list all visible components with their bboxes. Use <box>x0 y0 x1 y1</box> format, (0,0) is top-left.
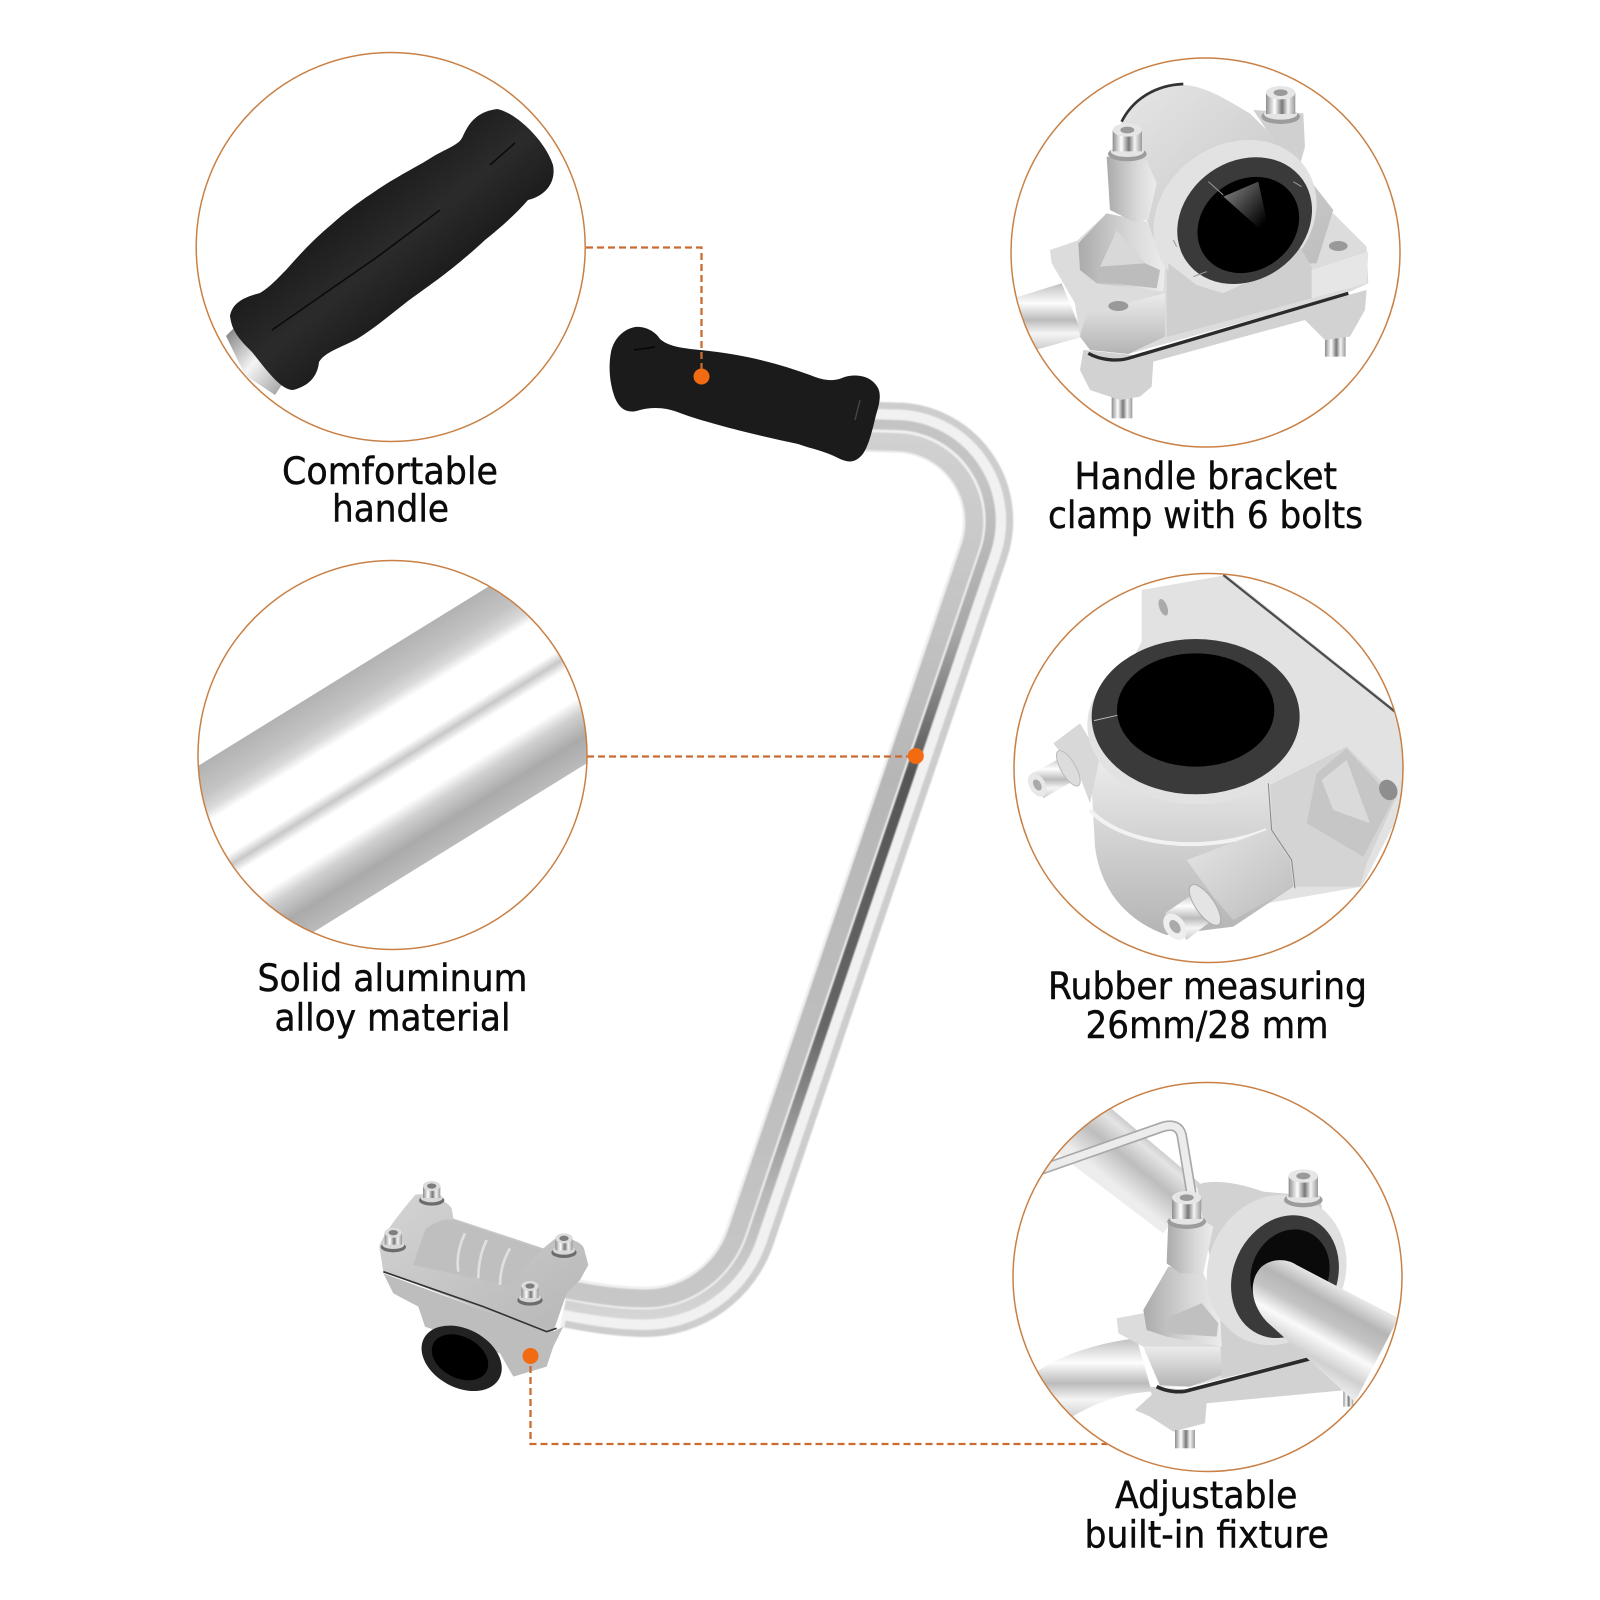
connector: built-in fixture <box>522 1348 1107 1444</box>
caption: aluminum alloy <box>258 957 528 1040</box>
back barrel <box>1121 85 1333 270</box>
caption: comfortable handle: Comfortable <box>282 450 498 493</box>
caption: comfortable handle: handle <box>332 488 449 530</box>
panel: adjustable fixture <box>1013 1082 1402 1472</box>
product: clamp on tube end <box>379 1181 588 1404</box>
clamp rubber sleeve <box>410 1312 513 1404</box>
rear plate <box>1136 575 1402 903</box>
stub tube <box>1013 283 1083 350</box>
caption: rubber measuring: Rubber measuring <box>1048 965 1367 1008</box>
lower cylinder <box>1090 757 1293 935</box>
connector: comfortable handle <box>586 248 710 384</box>
side rib <box>1143 1267 1222 1347</box>
caption: rubber measuring: 26mm/28 mm <box>1086 1004 1328 1047</box>
panel: handle bracket clamp <box>1011 58 1400 447</box>
caption: adjustable fixture: Adjustable <box>1115 1474 1298 1517</box>
left bolt lug <box>1053 723 1100 803</box>
panel: aluminum tube closeup <box>197 560 588 950</box>
caption: adjustable fixture <box>1084 1474 1329 1556</box>
clamp lower body <box>383 1273 563 1377</box>
side rib <box>1078 213 1165 292</box>
caption: aluminum alloy: alloy material <box>274 996 510 1040</box>
right rib <box>1267 747 1397 887</box>
caption: rubber measuring <box>1048 965 1367 1047</box>
bolt towers <box>1107 157 1157 222</box>
rubber ring <box>1092 639 1300 794</box>
front face under ring <box>1168 247 1312 337</box>
product: black grip <box>610 327 880 461</box>
caption: bracket clamp <box>1048 455 1363 537</box>
back barrel <box>1197 1182 1322 1255</box>
front tube <box>1253 1260 1398 1402</box>
bolts <box>1167 1191 1206 1229</box>
curved lower tube <box>1037 1338 1152 1420</box>
lower block <box>1080 290 1367 400</box>
rear tube <box>1058 1108 1200 1234</box>
bore <box>1117 653 1274 767</box>
bore <box>1198 176 1300 274</box>
rubber ring <box>1177 157 1312 284</box>
product: aluminum tube <box>565 405 1010 1334</box>
caption: aluminum alloy: Solid aluminum <box>258 957 528 1000</box>
upper block <box>1050 213 1368 354</box>
clamp upper body <box>379 1194 588 1332</box>
rubber ring <box>1231 1215 1339 1338</box>
top bolts <box>1108 123 1147 161</box>
lower bolts <box>1112 397 1132 418</box>
panel: rubber sleeve <box>1014 574 1405 962</box>
caption: comfortable handle <box>282 450 498 530</box>
bottom bolt <box>1163 884 1221 940</box>
upper block <box>1117 1310 1313 1387</box>
caption: bracket clamp: clamp with 6 bolts <box>1048 494 1363 537</box>
caption: adjustable fixture: built-in fixture <box>1084 1514 1329 1556</box>
collar <box>1206 1195 1346 1345</box>
clamp ribbed barrel <box>413 1220 542 1287</box>
panel: comfortable handle <box>196 52 585 442</box>
connector: aluminum tube <box>587 748 924 764</box>
bolt tower <box>1167 1218 1213 1273</box>
clamp gasket line <box>383 1272 557 1332</box>
collar <box>1154 140 1316 293</box>
caption: bracket clamp: Handle bracket <box>1074 455 1337 498</box>
clamp bolts <box>381 1181 577 1306</box>
enlarged grip <box>230 109 554 390</box>
silver stub <box>226 326 285 395</box>
collar <box>1087 694 1111 762</box>
rear clamp lug <box>1187 830 1293 920</box>
lower block <box>1135 1360 1347 1432</box>
side bolt <box>1028 750 1081 798</box>
allen key <box>1040 1126 1192 1195</box>
gasket <box>1088 293 1348 360</box>
